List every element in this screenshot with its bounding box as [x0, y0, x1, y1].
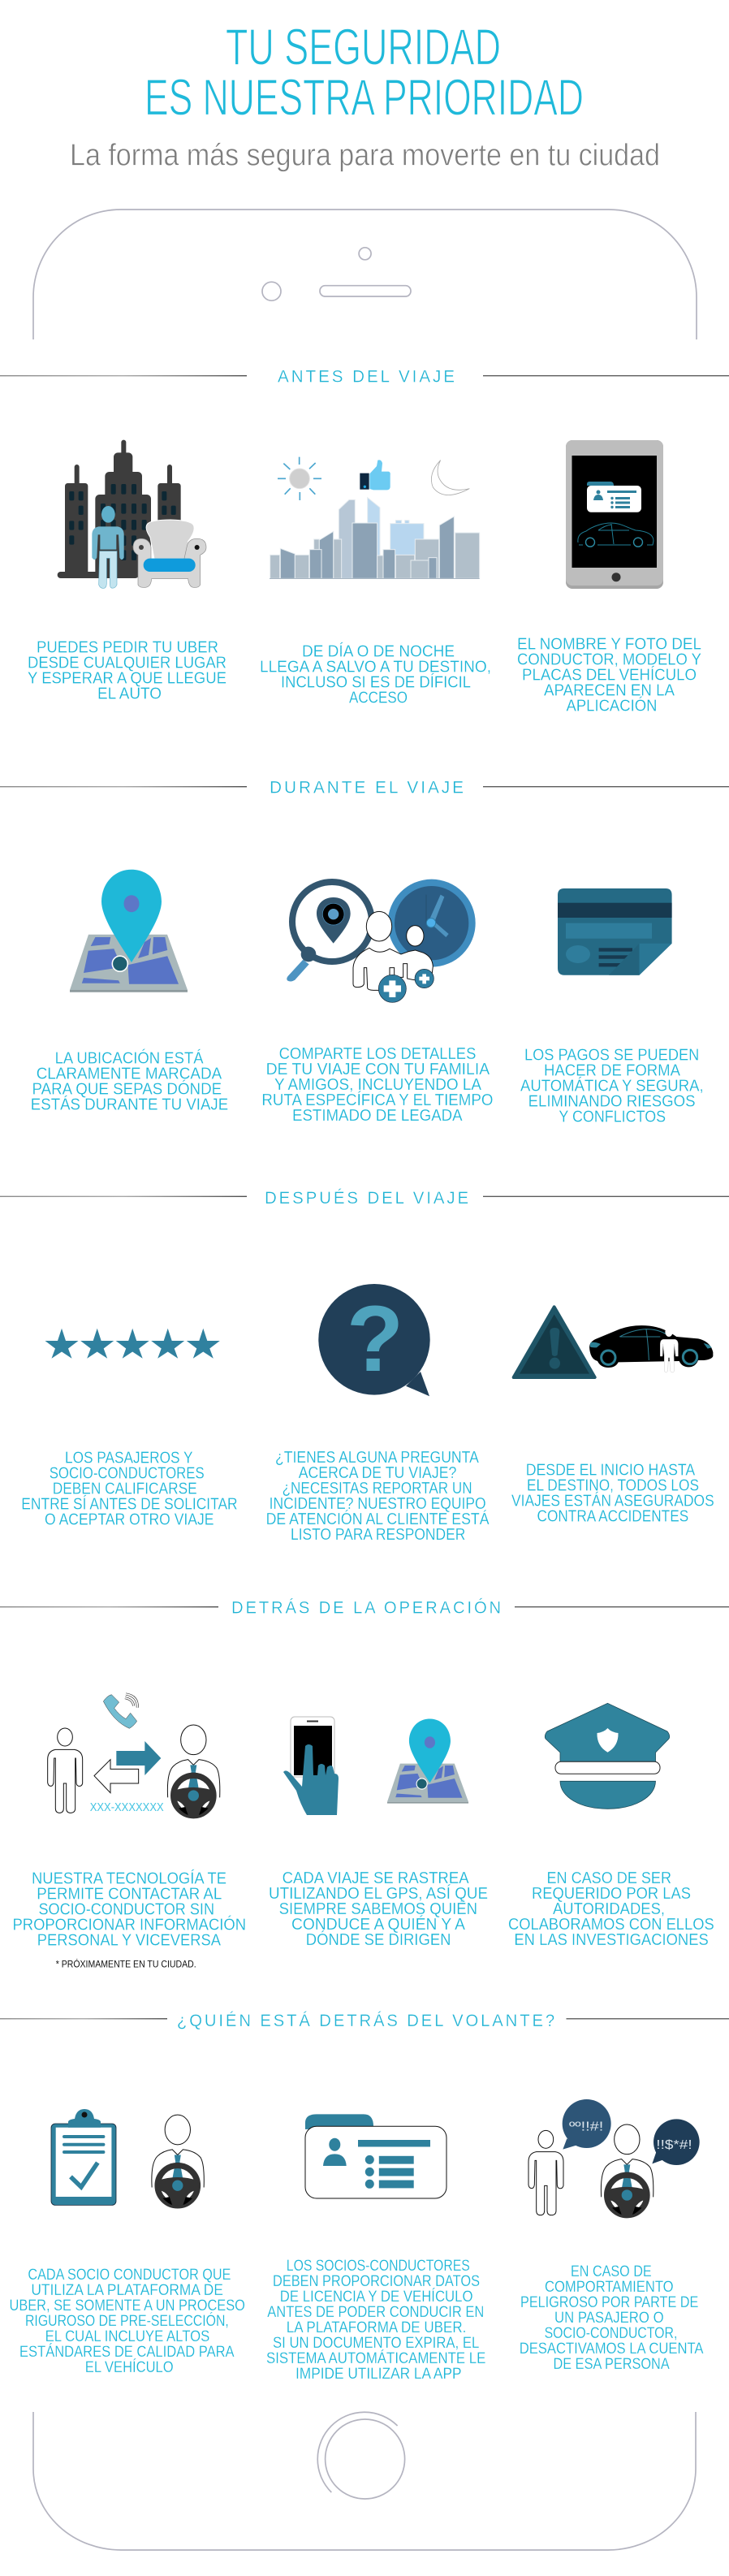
title: TU SEGURIDAD: [226, 19, 501, 76]
text: volante col 2: DE LICENCIA Y DE VEHÍCULO: [280, 2287, 472, 2306]
text: antes col 1: [28, 638, 226, 702]
icon: payment card: [558, 888, 672, 975]
text: después col 3: [511, 1462, 714, 1526]
text: volante col 1: CADA SOCIO CONDUCTOR QUE: [28, 2266, 231, 2284]
text: volante col 1: EL CUAL INCLUYE ALTOS: [45, 2327, 209, 2345]
text: volante col 2: DEBEN PROPORCIONAR DATOS: [273, 2272, 480, 2290]
text: antes col 3: PLACAS DEL VEHÍCULO: [522, 666, 697, 685]
text: antes col 3: [517, 636, 701, 715]
icon: city, person and armchair: [58, 440, 206, 588]
text: después col 1: O ACEPTAR OTRO VIAJE: [45, 1511, 214, 1529]
text: operación col 2: CADA VIAJE SE RASTREA: [283, 1869, 469, 1887]
icon: anonymous phone contact: [48, 1694, 220, 1816]
text: después col 3: CONTRA ACCIDENTES: [537, 1508, 688, 1526]
section heading: durante del viaje: DURANTE EL VIAJE: [270, 779, 466, 797]
subtitle: La forma más segura para moverte en tu ciudad: [70, 138, 660, 172]
text: antes col 2: DE DÍA O DE NOCHE: [302, 642, 455, 661]
phone frame top: [33, 210, 697, 339]
text: operación col 3: EN LAS INVESTIGACIONES: [514, 1931, 709, 1949]
text: durante col 3: [520, 1046, 704, 1126]
icon: arguing passenger and driver: ºº!!#!: [569, 2120, 603, 2133]
text: antes col 2: [260, 642, 491, 707]
text: después col 2: [266, 1449, 490, 1544]
text: operación col 2: CONDUCE A QUIÉN Y A: [291, 1915, 466, 1934]
text: volante col 1: EL VEHÍCULO: [85, 2358, 174, 2376]
icon: question bubble: [318, 1284, 430, 1396]
title: [145, 19, 584, 127]
text: volante col 3: COMPORTAMIENTO: [545, 2278, 674, 2296]
text: antes col 2: LLEGA A SALVO A TU DESTINO,: [260, 659, 491, 676]
text: volante col 1: UBER, SE SOMENTE A UN PROCESO: [10, 2297, 245, 2315]
section heading: antes del viaje: ANTES DEL VIAJE: [278, 368, 457, 387]
text: volante col 3: SOCIO-CONDUCTOR,: [545, 2324, 677, 2342]
text: después col 2: DE ATENCIÓN AL CLIENTE ESTÁ: [266, 1510, 490, 1528]
text: después col 1: DEBEN CALIFICARSE: [53, 1480, 197, 1498]
section heading: después del viaje: DESPUÉS DEL VIAJE: [265, 1189, 471, 1208]
phone frame bottom with home button: [33, 2412, 696, 2550]
text: volante col 1: [10, 2266, 245, 2376]
icon: warning triangle and insured car: [514, 1307, 713, 1377]
text: antes col 3: APARECEN EN LA: [544, 682, 675, 700]
text: durante col 3: ELIMINANDO RIESGOS: [528, 1092, 696, 1110]
text: antes col 1: DESDE CUALQUIER LUGAR: [28, 654, 226, 672]
text: después col 2: ¿NECESITAS REPORTAR UN: [283, 1480, 472, 1498]
text: operación col 2: UTILIZANDO EL GPS, ASÍ QUE: [269, 1884, 488, 1903]
text: operación col 3: [508, 1869, 714, 1949]
text: durante col 1: CLARAMENTE MARCADA: [37, 1065, 222, 1083]
icon: phone with gps map: [283, 1717, 468, 1815]
text: volante col 2: IMPIDE UTILIZAR LA APP: [295, 2365, 461, 2383]
icon: tablet with driver card and car: [566, 440, 663, 589]
text: operación col 1: PROPORCIONAR INFORMACIÓN: [13, 1916, 246, 1934]
icon: driver document folder: [305, 2114, 446, 2198]
text: operación col 1: SOCIO-CONDUCTOR SIN: [39, 1901, 214, 1919]
text: antes col 1: EL AUTO: [97, 685, 162, 702]
text: durante col 2: ESTIMADO DE LEGADA: [292, 1107, 463, 1125]
text: volante col 2: LOS SOCIOS-CONDUCTORES: [287, 2257, 470, 2275]
text: después col 2: INCIDENTE? NUESTRO EQUIPO: [270, 1495, 486, 1513]
text: antes col 3: APLICACIÓN: [567, 697, 658, 715]
icon: day and night skyline: [270, 457, 480, 579]
text: operación col 1: PERSONAL Y VICEVERSA: [37, 1932, 222, 1950]
text: después col 1: [21, 1450, 238, 1529]
icon: question bubble: ?: [347, 1287, 403, 1391]
icon: police cap: [545, 1703, 670, 1809]
text: durante col 3: AUTOMÁTICA Y SEGURA,: [520, 1076, 704, 1095]
text: volante col 1: UTILIZA LA PLATAFORMA DE: [31, 2281, 223, 2299]
text: volante col 2: [266, 2257, 485, 2383]
text: volante col 3: EN CASO DE: [571, 2263, 652, 2280]
text: volante col 2: SI UN DOCUMENTO EXPIRA, EL: [273, 2334, 479, 2352]
text: durante col 1: [31, 1048, 228, 1113]
text: después col 2: ACERCA DE TU VIAJE?: [299, 1464, 456, 1482]
text: durante col 3: LOS PAGOS SE PUEDEN: [524, 1046, 699, 1064]
text: antes col 1: PUEDES PEDIR TU UBER: [37, 638, 218, 656]
text: durante col 3: HACER DE FORMA: [544, 1061, 681, 1079]
text: volante col 3: DE ESA PERSONA: [554, 2355, 670, 2373]
text: operación col 1: [13, 1869, 246, 1950]
text: volante col 3: [520, 2263, 704, 2373]
text: durante col 3: Y CONFLICTOS: [559, 1108, 666, 1126]
text: después col 1: ENTRE SÍ ANTES DE SOLICITAR: [21, 1495, 238, 1514]
text: antes col 2: ACCESO: [349, 689, 408, 707]
icon: arguing passenger and driver: [528, 2099, 700, 2215]
text: después col 3: DESDE EL INICIO HASTA: [526, 1462, 696, 1480]
text: operación col 2: SIEMPRE SABEMOS QUIÉN: [279, 1900, 477, 1918]
text: volante col 2: SISTEMA AUTOMÁTICAMENTE LE: [266, 2349, 485, 2367]
icon: share trip details: [287, 880, 476, 1002]
text: volante col 3: DESACTIVAMOS LA CUENTA: [520, 2340, 704, 2358]
text: durante col 1: LA UBICACIÓN ESTÁ: [55, 1048, 204, 1067]
text: volante col 2: LA PLATAFORMA DE UBER.: [287, 2319, 466, 2336]
text: durante col 2: COMPARTE LOS DETALLES: [279, 1045, 476, 1063]
text: durante col 2: RUTA ESPECÍFICA Y EL TIEMPO: [261, 1091, 493, 1109]
text: volante col 2: ANTES DE PODER CONDUCIR EN: [267, 2303, 484, 2321]
text: antes col 2: INCLUSO SI ES DE DÍFICIL: [281, 673, 471, 692]
text: después col 2: ¿TIENES ALGUNA PREGUNTA: [275, 1449, 479, 1467]
icon: arguing passenger and driver: !!$*#!: [656, 2138, 692, 2152]
text: antes col 3: EL NOMBRE Y FOTO DEL: [517, 636, 701, 654]
text: durante col 2: Y AMIGOS, INCLUYENDO LA: [274, 1076, 482, 1094]
text: después col 1: LOS PASAJEROS Y: [65, 1450, 193, 1467]
section heading: quién está detrás del volante: ¿QUIÉN ESTÁ DETRÁS DEL VOLANTE?: [177, 2012, 557, 2030]
text: después col 1: SOCIO-CONDUCTORES: [50, 1465, 205, 1483]
icon: map pin: [70, 870, 188, 992]
text: volante col 3: UN PASAJERO O: [554, 2309, 664, 2327]
section heading: detrás de la operación: DETRÁS DE LA OPERACIÓN: [231, 1599, 503, 1618]
text: volante col 1: ESTÁNDARES DE CALIDAD PARA: [19, 2342, 235, 2361]
text: operación col 3: REQUERIDO POR LAS: [532, 1885, 691, 1903]
icon: clipboard and driver: [51, 2109, 204, 2206]
text: operación col 2: [269, 1869, 488, 1949]
text: operación col 1: PERMITE CONTACTAR AL: [37, 1886, 222, 1904]
text: después col 3: EL DESTINO, TODOS LOS: [527, 1477, 699, 1495]
text: operación col 3: AUTORIDADES,: [553, 1900, 665, 1918]
text: operación col 3: COLABORAMOS CON ELLOS: [508, 1916, 714, 1934]
text: operación col 3: EN CASO DE SER: [547, 1869, 671, 1887]
text: volante col 1: RIGUROSO DE PRE-SELECCIÓN,: [25, 2311, 229, 2330]
icon: anonymous phone contact: XXX-XXXXXXX: [90, 1801, 164, 1814]
text: operación col 1: NUESTRA TECNOLOGÍA TE: [32, 1869, 226, 1888]
text: durante col 1: ESTÁS DURANTE TU VIAJE: [31, 1095, 228, 1113]
text: volante col 3: PELIGROSO POR PARTE DE: [520, 2293, 698, 2311]
icon: five stars: [45, 1329, 220, 1359]
text: antes col 3: CONDUCTOR, MODELO Y: [517, 651, 701, 669]
text: durante col 2: [261, 1045, 493, 1125]
text: antes col 1: Y ESPERAR A QUE LLEGUE: [28, 669, 226, 687]
text: después col 2: LISTO PARA RESPONDER: [291, 1526, 465, 1544]
text: durante col 2: DE TU VIAJE CON TU FAMILIA: [266, 1061, 490, 1078]
text: operación col 2: DÓNDE SE DIRIGEN: [306, 1930, 451, 1949]
text: durante col 1: PARA QUE SEPAS DÓNDE: [32, 1079, 222, 1098]
footnote: * PRÓXIMAMENTE EN TU CIUDAD.: [56, 1957, 196, 1969]
